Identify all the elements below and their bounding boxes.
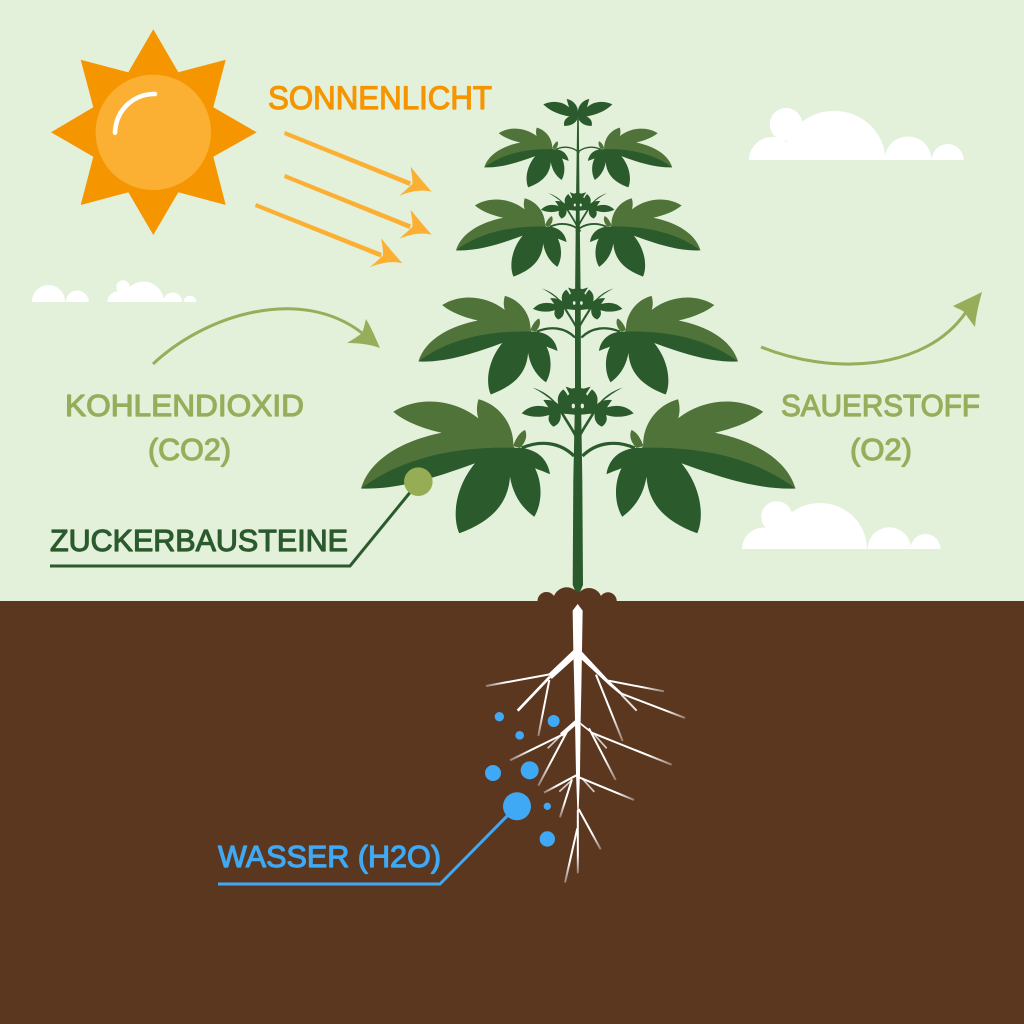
label: Sauerstoff: SAUERSTOFF — [781, 388, 980, 423]
top leaf sprout — [543, 99, 612, 126]
leaf cluster: third — [541, 192, 614, 227]
plant — [361, 99, 796, 597]
callout: Wasser — [218, 792, 531, 884]
callout: Zuckerbausteine: ZUCKERBAUSTEINE — [50, 523, 348, 558]
sky background — [0, 0, 1024, 601]
leaf cluster: second — [533, 288, 622, 330]
label: Sauerstoff — [781, 388, 980, 467]
roots — [486, 604, 685, 883]
ground — [0, 601, 1024, 1024]
heading: Sonnenlicht: SONNENLICHT — [268, 80, 492, 116]
arrow: oxygen release — [761, 292, 982, 364]
water droplets — [485, 712, 560, 847]
leaf cluster: lower — [522, 387, 634, 440]
cloud: small left pair — [32, 280, 196, 302]
callout: Wasser: WASSER (H2O) — [218, 839, 441, 874]
leaf pair: third — [418, 296, 738, 394]
label: Sauerstoff: (O2) — [850, 432, 912, 467]
leaf pair: upper — [484, 128, 672, 187]
soil mound — [538, 587, 617, 615]
cloud: top right — [749, 108, 964, 160]
stem — [573, 118, 583, 597]
label: Kohlendioxid — [65, 388, 304, 467]
cloud: lower right — [742, 501, 940, 549]
arrows: sunlight — [255, 131, 432, 268]
callout: Zuckerbausteine — [50, 467, 433, 566]
label: Kohlendioxid: (CO2) — [148, 432, 231, 467]
icon: sun — [51, 29, 257, 235]
leaf pair: second — [456, 198, 701, 277]
leaf pair: large — [361, 399, 796, 533]
arrow: carbon dioxide intake — [153, 309, 380, 364]
label: Kohlendioxid: KOHLENDIOXID — [65, 388, 304, 423]
